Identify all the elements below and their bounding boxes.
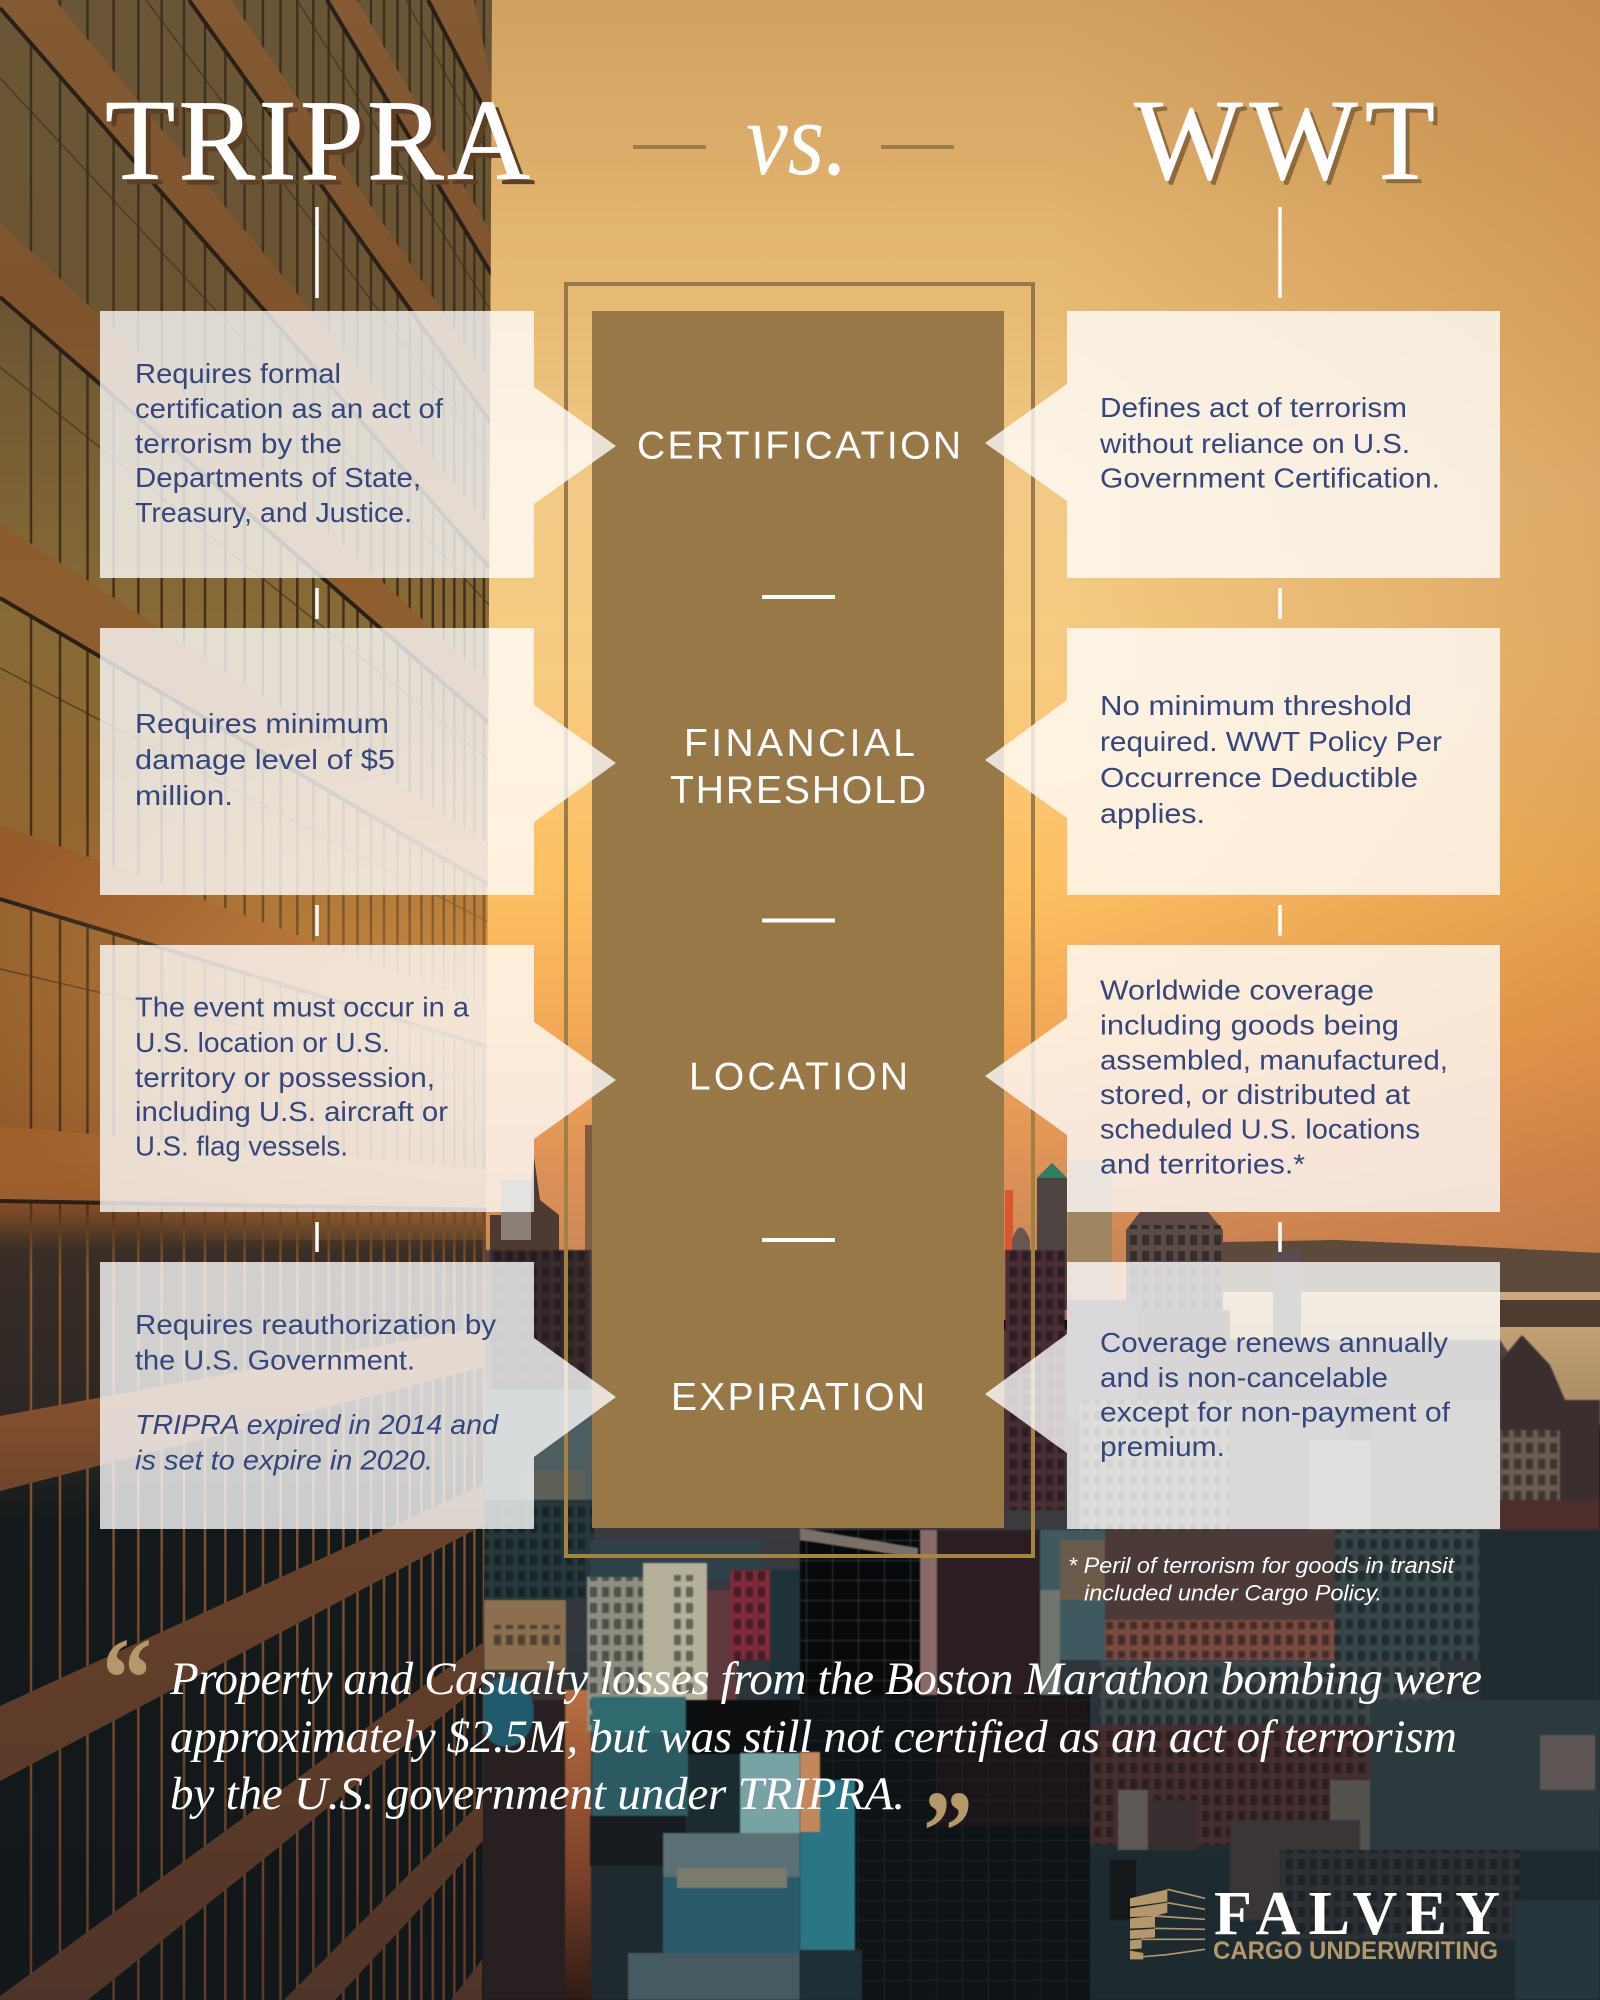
evening glow on facade (25, 812, 488, 1240)
title: TRIPRA: TRIPRA (105, 77, 530, 204)
title: vs. with dashes (633, 80, 954, 197)
footnote: included under Cargo Policy. (1084, 1581, 1382, 1606)
connector lines (317, 207, 1280, 1252)
panel: WWT location: stored, or distributed at (1100, 1079, 1410, 1110)
panel: WWT financial threshold: applies. (1100, 798, 1205, 829)
panel: WWT expiration: except for non-payment of (1100, 1397, 1450, 1428)
title: WWT: WWT (1134, 77, 1435, 204)
panel: WWT location (985, 945, 1500, 1212)
label: financial threshold (670, 722, 926, 812)
quote: by the U.S. government under TRIPRA. (170, 1768, 905, 1820)
window head lines (0, 0, 492, 1085)
title: vs. with dashes: vs. (746, 80, 848, 197)
quote: Property and Casualty losses from the Boston Marathon bombing were (169, 1653, 1482, 1705)
panel: WWT expiration: and is non-cancelable (1100, 1362, 1388, 1393)
panel: WWT location: Worldwide coverage (1100, 974, 1374, 1006)
panel: TRIPRA location: U.S. flag vessels. (135, 1131, 348, 1162)
panel: WWT certification: Government Certification. (1100, 462, 1440, 494)
foreground buildings, right of centre (800, 1528, 1600, 2000)
panel: TRIPRA certification: Treasury, and Justice. (135, 497, 412, 528)
quote: approximately $2.5M, but was still not certified as an act of terrorism (170, 1711, 1457, 1763)
footnote (1068, 1553, 1455, 1606)
sky (0, 0, 1600, 1320)
panel: WWT location: assembled, manufactured, (1100, 1044, 1448, 1076)
centre frame (566, 284, 1033, 1556)
logo: Falvey Cargo Underwriting (1130, 1880, 1500, 1965)
panel: TRIPRA certification (100, 311, 616, 578)
panel: WWT financial threshold: No minimum threshold (1100, 690, 1412, 721)
label: financial threshold: FINANCIAL (684, 722, 915, 765)
panel: WWT expiration: premium. (1100, 1431, 1225, 1462)
panel: TRIPRA location: territory or possession, (135, 1062, 435, 1093)
panel: TRIPRA certification: certification as an act of (135, 393, 443, 424)
label: location: LOCATION (689, 1055, 908, 1098)
panel: TRIPRA location (100, 945, 616, 1212)
panel: WWT expiration: Coverage renews annually (1100, 1327, 1448, 1358)
panel: TRIPRA expiration: Requires reauthorization by (135, 1309, 496, 1340)
panel: WWT location: and territories.* (1100, 1149, 1305, 1180)
footnote: * Peril of terrorism for goods in transit (1068, 1553, 1455, 1578)
icon: closing quotation mark: ” (923, 1768, 973, 1895)
label: expiration: EXPIRATION (671, 1376, 925, 1419)
panel: WWT financial threshold (985, 628, 1500, 895)
centre column (592, 311, 1004, 1528)
mullions (31, 0, 484, 2000)
panel: TRIPRA certification: Departments of State, (135, 462, 421, 493)
panel: WWT financial threshold: Occurrence Deductible (1100, 762, 1418, 793)
panel: TRIPRA location: U.S. location or U.S. (135, 1027, 390, 1058)
label: certification: CERTIFICATION (637, 424, 961, 468)
icon: stacked building mark (1130, 1889, 1205, 1959)
panel: WWT location: including goods being (1100, 1010, 1399, 1041)
panel: TRIPRA location: including U.S. aircraft or (135, 1096, 448, 1127)
panel: WWT financial threshold: required. WWT Policy Per (1100, 726, 1442, 757)
icon: opening quotation mark: “ (102, 1615, 152, 1742)
slab shadow lines (0, 0, 492, 1210)
panel: TRIPRA expiration: is set to expire in 2020. (135, 1444, 433, 1476)
far skyline and water (490, 1125, 1600, 1425)
panel: TRIPRA expiration: the U.S. Government. (135, 1345, 415, 1376)
middle city blocks (484, 1250, 1600, 2000)
panel: TRIPRA location: The event must occur in a (135, 992, 469, 1023)
panel: TRIPRA expiration: TRIPRA expired in 2014 and (135, 1409, 499, 1440)
quote (102, 1615, 1482, 1895)
logo: Falvey Cargo Underwriting: FALVEY (1214, 1880, 1500, 1948)
panel: TRIPRA expiration (100, 1262, 616, 1529)
label: financial threshold: THRESHOLD (670, 769, 926, 812)
panel: WWT certification: without reliance on U.S. (1099, 428, 1410, 459)
floor slabs (0, 0, 492, 2000)
panel: TRIPRA certification: terrorism by the (135, 428, 342, 459)
panel: TRIPRA financial threshold (100, 628, 616, 895)
panel: WWT expiration (985, 1262, 1500, 1529)
panel: TRIPRA financial threshold: Requires minimum (135, 708, 389, 739)
skyscraper on the left (0, 0, 500, 2000)
separators (762, 597, 835, 1240)
logo: Falvey Cargo Underwriting: CARGO UNDERWRITING (1213, 1937, 1498, 1965)
panel: TRIPRA certification: Requires formal (135, 358, 341, 389)
panel: TRIPRA financial threshold: damage level of $5 (135, 744, 395, 775)
panel: WWT location: scheduled U.S. locations (1100, 1113, 1420, 1144)
panel: TRIPRA financial threshold: million. (135, 780, 233, 811)
foreground buildings, left of centre (478, 1500, 800, 2000)
panel: WWT certification (985, 311, 1500, 578)
panel: WWT certification: Defines act of terrorism (1100, 392, 1407, 423)
